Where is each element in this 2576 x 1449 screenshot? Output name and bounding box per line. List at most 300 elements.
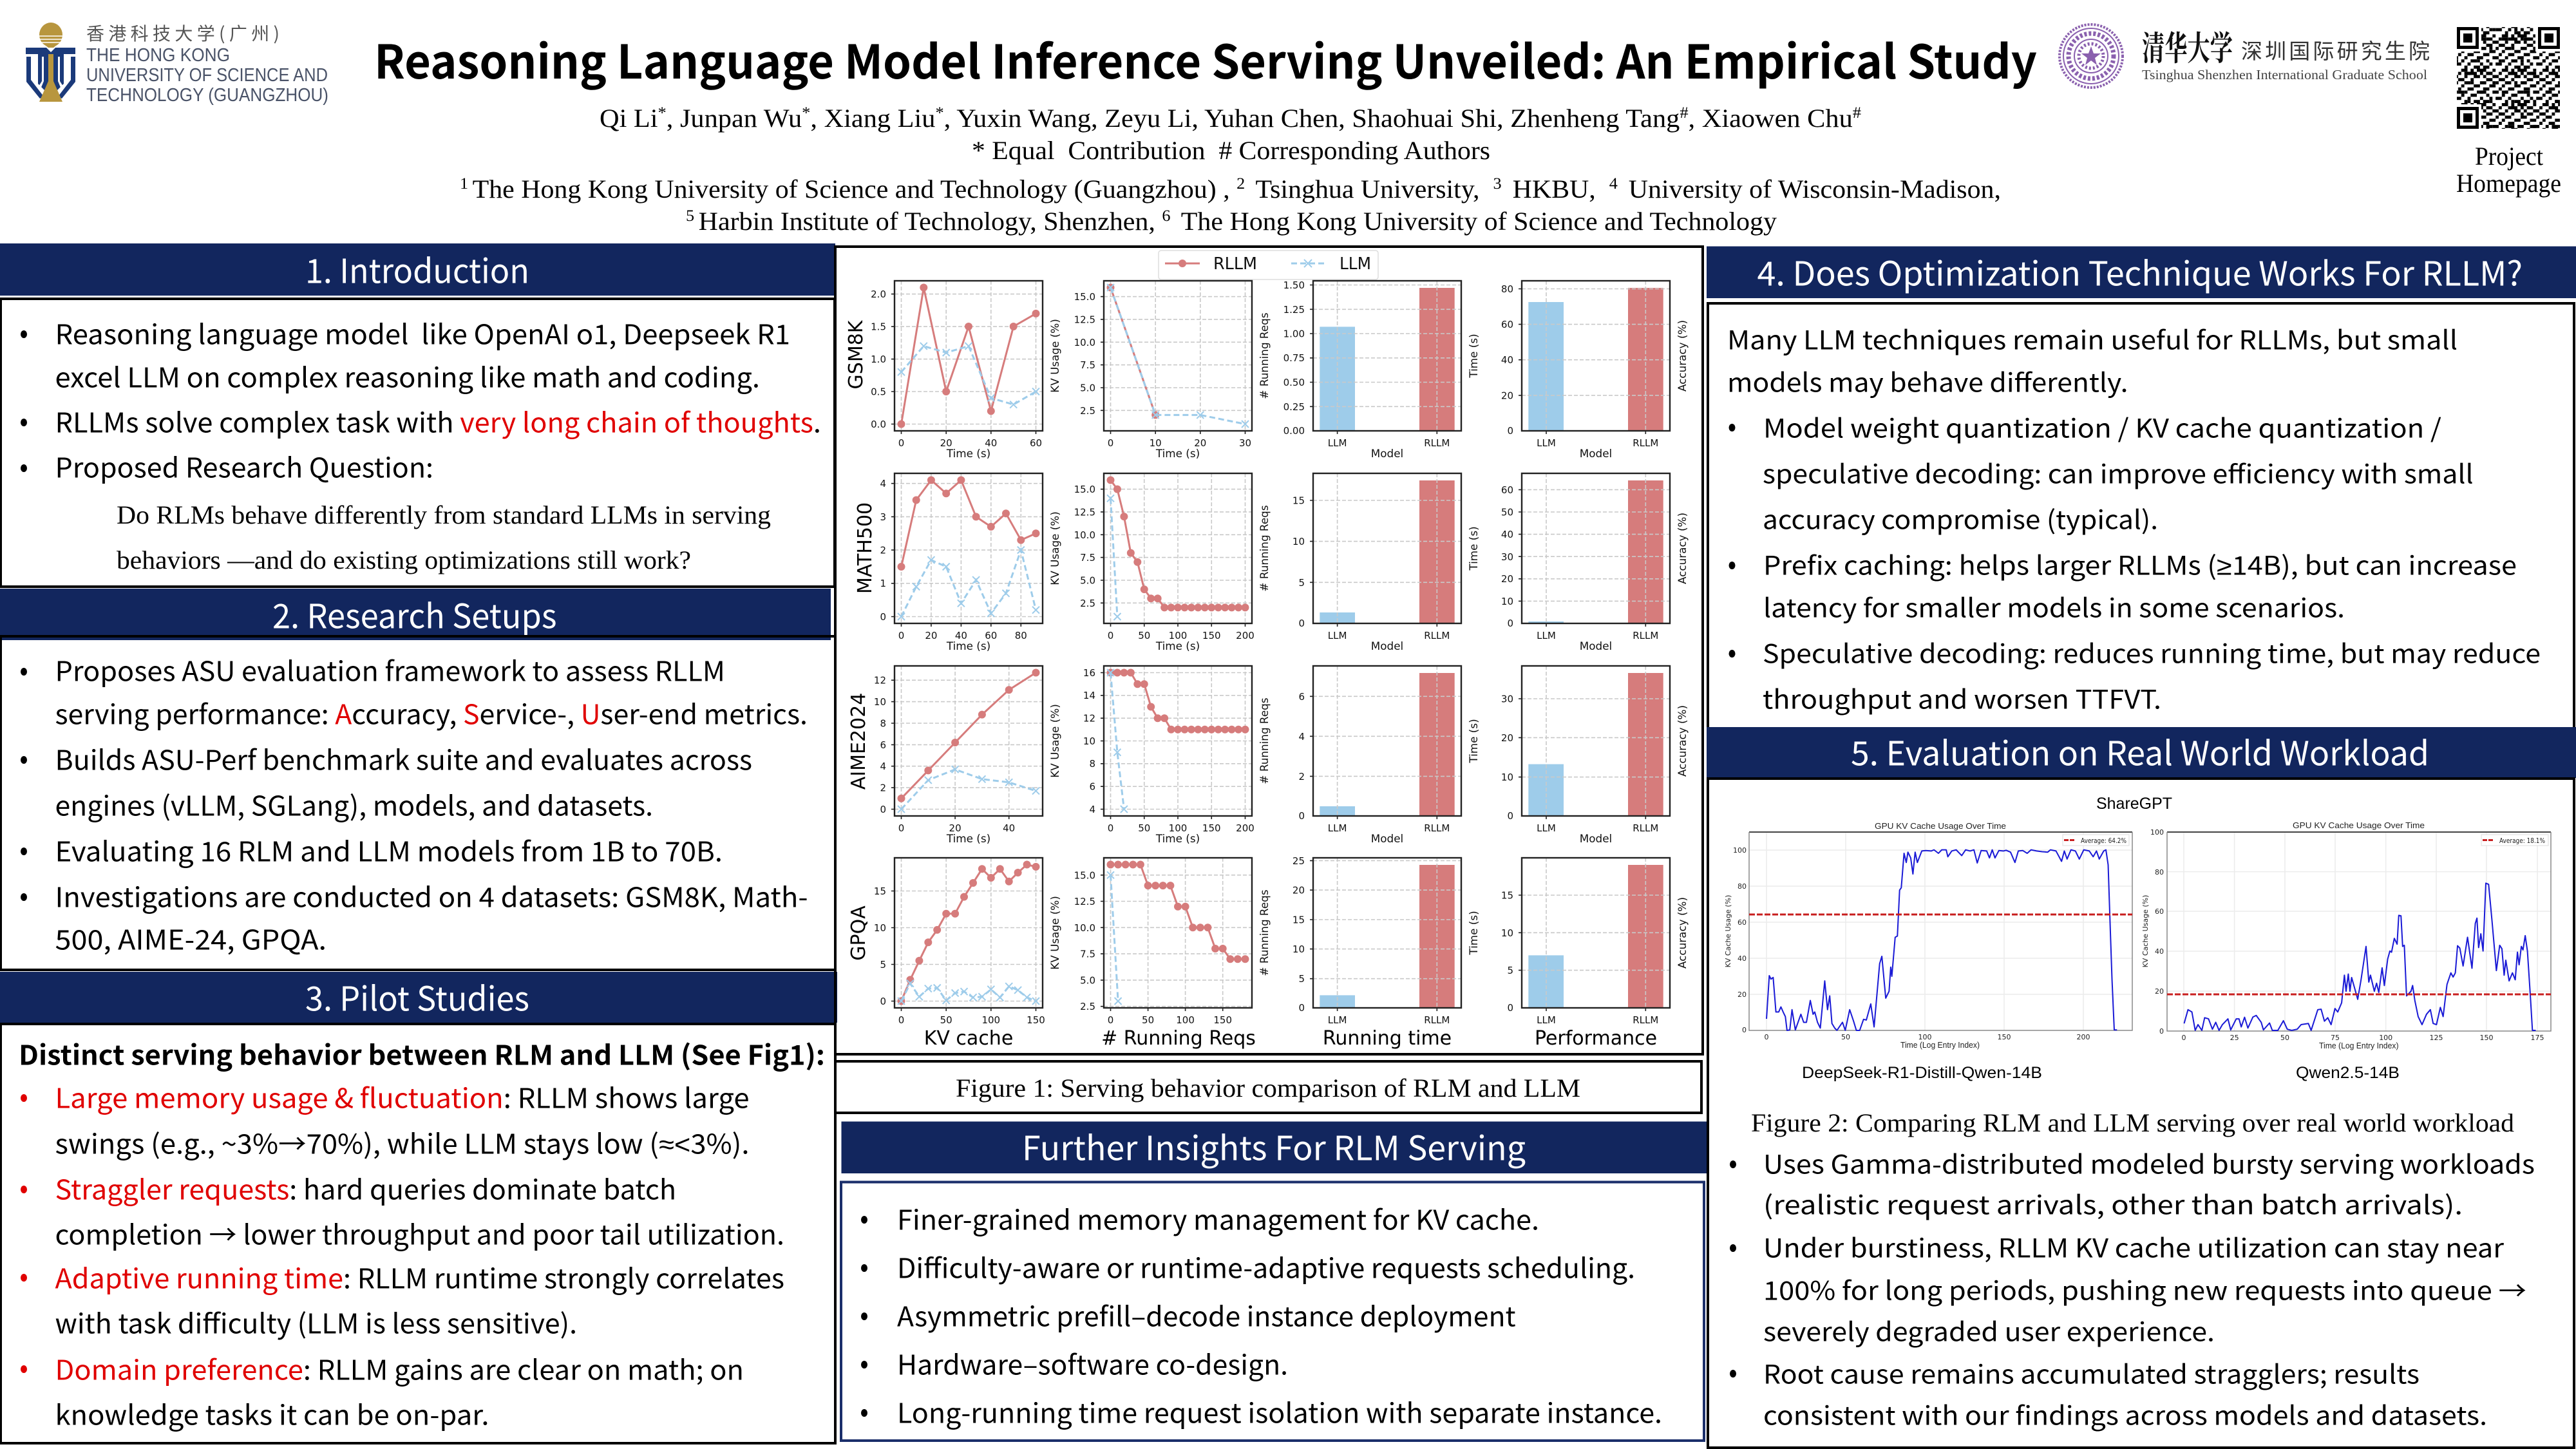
line chart: AIME2024 running requests: 200: [1236, 822, 1255, 834]
text block: introduction body: RLLMs solve complex task with very long chain of thoughts .: [55, 402, 821, 440]
text block: further insights list: Long-running time request isolation with separate instance.: [897, 1392, 1662, 1431]
line chart: MATH500 KV usage: 1: [880, 578, 886, 589]
panel: figure 1 charts: [835, 247, 1703, 1054]
bar chart: GPQA running time: 10: [1293, 943, 1305, 955]
line chart: DeepSeek-R1-Distill-Qwen-14B KV cache: 0: [1742, 1026, 1747, 1034]
text block: research setups body: [1, 636, 835, 970]
line chart: AIME2024 KV usage: 8: [880, 717, 886, 729]
heading: introduction: 1. Introduction: [305, 245, 529, 292]
bar chart: MATH500 accuracy: 0: [1507, 618, 1513, 629]
bar chart: AIME2024 accuracy: 30: [1501, 693, 1513, 705]
authors block: , Yuxin Wang, Zeyu Li, Yuhan Chen, Shaohuai Shi, Zhenheng Tang: [944, 104, 1680, 133]
line chart: MATH500 KV usage: 2: [880, 545, 886, 556]
line chart: DeepSeek-R1-Distill-Qwen-14B KV cache: 100: [1918, 1033, 1932, 1041]
line chart: GPQA running requests: 2.5: [1080, 1001, 1095, 1012]
line chart: DeepSeek-R1-Distill-Qwen-14B KV cache: 200: [2076, 1033, 2090, 1041]
bar chart: GSM8K running time: 1.25: [1283, 304, 1305, 316]
authors block: , Xiaowen Chu: [1689, 104, 1853, 133]
text block: research setups body: serving performance: Accuracy, Service-, User-end metrics.: [55, 693, 808, 733]
line chart: Qwen2.5-14B KV cache: [2141, 820, 2551, 1050]
bar chart: GPQA running time: [1293, 855, 1480, 1026]
line chart: GPQA running requests: 150: [1213, 1014, 1232, 1026]
bar chart: GSM8K running time: 1.00: [1283, 328, 1305, 340]
line chart: AIME2024 running requests: 12: [1083, 713, 1095, 724]
authors block: University of Wisconsin-Madison,: [1622, 175, 2001, 204]
line chart: DeepSeek-R1-Distill-Qwen-14B KV cache: 100: [1733, 846, 1747, 855]
line chart: AIME2024 running requests: [1083, 666, 1271, 845]
line chart: MATH500 KV usage: Time (s): [946, 639, 990, 652]
bar chart: AIME2024 running time: LLM: [1328, 822, 1347, 834]
bar chart: GSM8K running time: 0.25: [1283, 401, 1305, 413]
panel: pilot studies: [0, 972, 837, 1443]
line chart: GPQA KV usage: 15: [874, 886, 886, 897]
authors block: 1: [460, 175, 473, 193]
line chart: MATH500 KV usage: 0: [898, 630, 904, 641]
model names under charts: [1802, 1064, 2400, 1082]
text block: research setups body: Builds ASU-Perf benchmark suite and evaluates across: [55, 739, 752, 778]
line chart: GSM8K running requests: 10.0: [1074, 337, 1095, 348]
line chart: MATH500 KV usage: 60: [985, 630, 997, 641]
heading: research setups: [0, 589, 831, 640]
line chart: GSM8K KV usage: 0.5: [871, 386, 886, 398]
row label: GSM8K: GSM8K: [845, 319, 867, 389]
line chart: DeepSeek-R1-Distill-Qwen-14B KV cache: KV Cache Usage (%): [1724, 895, 1732, 967]
line chart: AIME2024 KV usage: 0: [880, 804, 886, 815]
line chart: GPQA running requests: 50: [1142, 1014, 1154, 1026]
line chart: MATH500 KV usage: KV Usage (%): [1048, 511, 1061, 585]
text block: pilot studies body: [1, 1024, 835, 1443]
bar chart: GSM8K running time: 1.50: [1283, 279, 1305, 291]
line chart: Qwen2.5-14B KV cache: 20: [2155, 987, 2164, 996]
bar chart: GPQA accuracy: 10: [1501, 927, 1513, 939]
line chart: GPQA KV usage: 5: [880, 959, 886, 971]
text block: pilot studies body: completion → lower throughput and poor tail utilization.: [55, 1213, 784, 1253]
line chart: Qwen2.5-14B KV cache: Average: 18.1%: [2499, 837, 2545, 845]
caption: figure 1: [835, 1061, 1701, 1113]
line chart: AIME2024 KV usage: 12: [874, 675, 886, 687]
bar chart: GSM8K running time: Model: [1371, 447, 1403, 460]
line chart: Qwen2.5-14B KV cache: 100: [2150, 828, 2164, 837]
line chart: GPQA KV usage: 150: [1027, 1014, 1045, 1026]
bar chart: MATH500 running time: Model: [1371, 639, 1403, 652]
line chart: AIME2024 KV usage: 4: [880, 761, 886, 772]
bar chart: GPQA accuracy: RLLM: [1633, 1014, 1658, 1026]
panel: real world workload: [1707, 726, 2576, 1448]
line chart: Qwen2.5-14B KV cache: KV Cache Usage (%): [2141, 895, 2150, 967]
bar chart: GPQA running time: Time (s): [1467, 911, 1480, 956]
line chart: AIME2024 running requests: 16: [1083, 667, 1095, 679]
line chart: Qwen2.5-14B KV cache: 25: [2230, 1034, 2239, 1042]
line chart: MATH500 running requests: 0: [1108, 630, 1113, 641]
line chart: AIME2024 KV usage: 10: [874, 696, 886, 708]
authors block: 2: [1236, 175, 1249, 193]
bar chart: AIME2024 running time: 2: [1298, 771, 1305, 782]
line chart: AIME2024 running requests: 150: [1202, 822, 1221, 834]
bar chart: MATH500 running time: 15: [1293, 495, 1305, 506]
line chart: GSM8K KV usage: 0.0: [871, 419, 886, 430]
bar chart: AIME2024 running time: 4: [1298, 731, 1305, 743]
line chart: AIME2024 running requests: # Running Reqs: [1258, 697, 1271, 784]
heading: introduction: [0, 243, 835, 296]
column label: Performance: Performance: [1535, 1027, 1657, 1050]
line chart: Qwen2.5-14B KV cache: 175: [2531, 1034, 2544, 1042]
text block: optimization techniques body: Many LLM techniques remain useful for RLLMs, but small: [1727, 319, 2458, 357]
heading: further insights: Further Insights For RLM Serving: [1022, 1122, 1526, 1170]
bar chart: GSM8K accuracy: RLLM: [1633, 437, 1658, 449]
bar chart: MATH500 accuracy: Model: [1580, 639, 1612, 652]
bar chart: AIME2024 accuracy: 0: [1507, 810, 1513, 822]
bar chart: GPQA running time: 20: [1293, 885, 1305, 896]
bar chart: AIME2024 accuracy: Model: [1580, 832, 1612, 845]
line chart: Qwen2.5-14B KV cache: GPU KV Cache Usage Over Time: [2293, 820, 2425, 830]
bar chart: MATH500 accuracy: 60: [1501, 484, 1513, 496]
line chart: GSM8K KV usage: Time (s): [946, 447, 990, 460]
heading: research setups: 2. Research Setups: [272, 590, 556, 638]
bar chart: GSM8K accuracy: Model: [1580, 447, 1612, 460]
logo text: school name: [2142, 21, 2430, 82]
text block: optimization techniques body: models may behave differently.: [1727, 362, 2128, 399]
authors block: 3: [1493, 175, 1506, 193]
text block: real world workload findings: severely degraded user experience.: [1763, 1311, 2215, 1349]
authors block: , Xiang Liu: [810, 104, 935, 133]
bar chart: GSM8K running time: 0.00: [1283, 425, 1305, 437]
text block: pilot studies body: swings (e.g., ~3%→70%), while LLM stays low ( ≈<3%).: [55, 1123, 750, 1162]
text block: optimization techniques body: accuracy compromise (typical).: [1763, 500, 2158, 537]
line chart: GSM8K running requests: 0: [1108, 437, 1113, 449]
line chart: MATH500 running requests: 200: [1236, 630, 1255, 641]
row label: MATH500: MATH500: [854, 502, 876, 594]
line chart: DeepSeek-R1-Distill-Qwen-14B KV cache: 40: [1738, 954, 1747, 963]
column label: Running Reqs: # Running Reqs: [1101, 1027, 1256, 1050]
line chart: MATH500 running requests: 5.0: [1080, 574, 1095, 586]
line chart: Qwen2.5-14B KV cache: 40: [2155, 947, 2164, 956]
caption: figure 1: Figure 1: Serving behavior comparison of RLM and LLM: [956, 1074, 1580, 1103]
authors block: 4: [1609, 175, 1622, 193]
bar chart: GSM8K accuracy: 80: [1501, 283, 1513, 295]
line chart: MATH500 running requests: [1074, 473, 1271, 652]
line chart: MATH500 running requests: 2.5: [1080, 598, 1095, 609]
text block: real world workload findings: Root cause remains accumulated stragglers; results: [1763, 1354, 2420, 1391]
text block: real world workload findings: (realistic request arrivals, other than batch arrivals).: [1763, 1185, 2463, 1222]
bar chart: GSM8K running time: Time (s): [1467, 334, 1480, 379]
line chart: MATH500 KV usage: 3: [880, 511, 886, 523]
text block: introduction body: Do RLMs behave differently from standard LLMs in serving: [117, 500, 771, 529]
bar chart: GSM8K running time: RLLM: [1424, 437, 1450, 449]
line chart: GSM8K KV usage: 1.5: [871, 321, 886, 333]
line chart: AIME2024 running requests: 6: [1089, 781, 1095, 793]
bar chart: MATH500 accuracy: RLLM: [1633, 630, 1658, 641]
line chart: GPQA KV usage: 10: [874, 922, 886, 934]
bar chart: GPQA accuracy: Accuracy (%): [1676, 897, 1689, 969]
authors block: * Equal Contribution # Corresponding Authors: [972, 136, 1490, 165]
line chart: MATH500 KV usage: 4: [880, 478, 886, 489]
QR caption: Homepage: [2456, 169, 2561, 198]
text block: introduction body: Proposed Research Question:: [55, 447, 433, 486]
line chart: GPQA running requests: 0: [1108, 1014, 1113, 1026]
authors block: Qi Li: [600, 104, 655, 133]
bar chart: GPQA running time: LLM: [1328, 1014, 1347, 1026]
authors block: The Hong Kong University of Science and Technology: [1175, 207, 1777, 236]
bar chart: MATH500 accuracy: 10: [1501, 596, 1513, 607]
legend: RLLM: [1213, 254, 1257, 273]
line chart: DeepSeek-R1-Distill-Qwen-14B KV cache: 60: [1738, 918, 1747, 927]
authors block: The Hong Kong University of Science and Technology (Guangzhou) ,: [473, 175, 1236, 204]
icon: QR code: [2457, 27, 2560, 129]
line chart: MATH500 running requests: 150: [1202, 630, 1221, 641]
line chart: DeepSeek-R1-Distill-Qwen-14B KV cache: 150: [1998, 1033, 2011, 1041]
line chart: GSM8K KV usage: 0: [898, 437, 904, 449]
bar chart: AIME2024 accuracy: 10: [1501, 772, 1513, 783]
bar chart: MATH500 running time: 5: [1298, 577, 1305, 589]
line chart: Qwen2.5-14B KV cache: 80: [2155, 868, 2164, 876]
line chart: GSM8K KV usage: 2.0: [871, 289, 886, 300]
bar chart: MATH500 accuracy: 50: [1501, 506, 1513, 518]
authors block: #: [1680, 104, 1689, 122]
icon: HKUST emblem: [26, 23, 75, 102]
line chart: AIME2024 running requests: 10: [1083, 735, 1095, 747]
bar chart: MATH500 accuracy: Accuracy (%): [1676, 513, 1689, 584]
bar chart: GSM8K accuracy: [1501, 281, 1689, 460]
authors block: 6: [1162, 207, 1175, 225]
text block: pilot studies body: Large memory usage & fluctuation : RLLM shows large: [55, 1077, 750, 1117]
line chart: GSM8K running requests: 7.5: [1080, 359, 1095, 371]
bar chart: AIME2024 accuracy: LLM: [1537, 822, 1556, 834]
line chart: DeepSeek-R1-Distill-Qwen-14B KV cache: 20: [1738, 990, 1747, 999]
line chart: GSM8K running requests: 30: [1239, 437, 1251, 449]
text block: optimization techniques body: speculative decoding: can improve efficiency with small: [1763, 453, 2474, 491]
line chart: GPQA KV usage: KV Usage (%): [1048, 896, 1061, 970]
line chart: GSM8K KV usage: 60: [1030, 437, 1042, 449]
panel: introduction: [0, 243, 835, 587]
text block: introduction body: [1, 299, 835, 587]
bar chart: GSM8K running time: LLM: [1328, 437, 1347, 449]
line chart: MATH500 running requests: 7.5: [1080, 552, 1095, 564]
bar chart: GPQA accuracy: 0: [1507, 1002, 1513, 1014]
text block: introduction body: excel LLM on complex reasoning like math and coding.: [55, 357, 760, 395]
heading: further insights: [841, 1122, 1707, 1173]
line chart: GPQA running requests: # Running Reqs: [1258, 889, 1271, 976]
legend: [1159, 251, 1378, 279]
bar chart: MATH500 accuracy: [1501, 473, 1689, 652]
panel: optimization techniques: [1707, 246, 2576, 728]
authors block: [460, 104, 2001, 236]
line chart: GSM8K running requests: 5.0: [1080, 383, 1095, 394]
line chart: GSM8K running requests: 2.5: [1080, 405, 1095, 417]
line chart: AIME2024 KV usage: KV Usage (%): [1048, 704, 1061, 778]
logo text: university name: [86, 20, 328, 106]
line chart: GSM8K running requests: Time (s): [1155, 447, 1200, 460]
bar chart: GSM8K accuracy: 40: [1501, 354, 1513, 366]
line chart: AIME2024 KV usage: 6: [880, 739, 886, 751]
title: Reasoning Language Model Inference Serving Unveiled: An Empirical Study: [374, 24, 2037, 92]
bar chart: MATH500 running time: RLLM: [1424, 630, 1450, 641]
line chart: Qwen2.5-14B KV cache: 75: [2331, 1034, 2340, 1042]
model names under charts: Qwen2.5-14B: [2296, 1064, 2400, 1082]
line chart: AIME2024 running requests: 0: [1108, 822, 1113, 834]
line chart: MATH500 KV usage: [880, 473, 1061, 652]
line chart: AIME2024 running requests: 50: [1138, 822, 1150, 834]
text block: introduction body: Reasoning language model like OpenAI o1, Deepseek R1: [55, 313, 790, 353]
bar chart: MATH500 accuracy: LLM: [1537, 630, 1556, 641]
line chart: DeepSeek-R1-Distill-Qwen-14B KV cache: GPU KV Cache Usage Over Time: [1875, 821, 2006, 831]
text block: optimization techniques body: [1708, 303, 2574, 728]
line chart: GPQA running requests: 12.5: [1074, 896, 1095, 907]
line chart: GPQA KV usage: 50: [940, 1014, 952, 1026]
text block: pilot studies body: Distinct serving behavior between RLM and LLM (See Fig1):: [19, 1034, 825, 1073]
bar chart: GPQA running time: RLLM: [1424, 1014, 1450, 1026]
line chart: GPQA KV usage: [874, 858, 1061, 1026]
row label: AIME2024: AIME2024: [848, 693, 870, 790]
bar chart: GSM8K accuracy: 60: [1501, 319, 1513, 330]
text block: pilot studies body: Straggler requests: hard queries dominate batch: [55, 1168, 676, 1208]
line chart: GSM8K KV usage: 1.0: [871, 354, 886, 365]
text block: optimization techniques body: Prefix caching: helps larger RLLMs ( ≥14B), but can increase: [1763, 545, 2517, 582]
text block: pilot studies body: knowledge tasks it can be on-par.: [55, 1394, 489, 1434]
line chart: GSM8K KV usage: KV Usage (%): [1048, 319, 1061, 393]
authors block: *: [658, 104, 667, 122]
authors block: HKBU,: [1506, 175, 1609, 204]
bar chart: MATH500 running time: 10: [1293, 536, 1305, 547]
line chart: GPQA running requests: 15.0: [1074, 869, 1095, 881]
line chart: GPQA running requests: 10.0: [1074, 922, 1095, 934]
line chart: Qwen2.5-14B KV cache: Time (Log Entry Index): [2319, 1041, 2398, 1050]
text block: further insights list: Finer-grained memory management for KV cache.: [897, 1199, 1539, 1238]
line chart: GSM8K running requests: 12.5: [1074, 314, 1095, 325]
QR caption: [2456, 142, 2561, 198]
line chart: MATH500 KV usage: 40: [955, 630, 967, 641]
line chart: GPQA running requests: 100: [1176, 1014, 1195, 1026]
heading: pilot studies: 3. Pilot Studies: [305, 972, 529, 1020]
bar chart: GPQA accuracy: [1501, 858, 1689, 1026]
bar chart: AIME2024 accuracy: [1501, 666, 1689, 845]
bar chart: GPQA running time: 25: [1293, 855, 1305, 867]
authors block: Tsinghua University,: [1249, 175, 1493, 204]
line chart: AIME2024 KV usage: 2: [880, 782, 886, 794]
heading: real world workload: [1707, 726, 2576, 778]
line chart: DeepSeek-R1-Distill-Qwen-14B KV cache: Time (Log Entry Index): [1900, 1040, 1980, 1050]
text block: real world workload findings: Uses Gamma-distributed modeled bursty serving workloads: [1763, 1144, 2535, 1181]
text block: real world workload findings: 100% for long periods, pushing new requests into queue →: [1763, 1270, 2526, 1307]
line chart: Qwen2.5-14B KV cache: 125: [2429, 1034, 2443, 1042]
text block: optimization techniques body: Speculative decoding: reduces running time, but may reduce: [1763, 634, 2541, 671]
text block: introduction body: behaviors —and do existing optimizations still work?: [117, 545, 691, 574]
line chart: DeepSeek-R1-Distill-Qwen-14B KV cache: Average: 64.2%: [2081, 837, 2126, 845]
text block: real world workload findings: Under burstiness, RLLM KV cache utilization can stay near: [1763, 1227, 2505, 1265]
logo text: school name: Tsinghua Shenzhen International Graduate School: [2142, 67, 2427, 82]
text block: further insights list: Asymmetric prefill–decode instance deployment: [897, 1296, 1516, 1334]
line chart: DeepSeek-R1-Distill-Qwen-14B KV cache: 0: [1765, 1033, 1768, 1041]
line chart: GPQA KV usage: 100: [981, 1014, 1000, 1026]
authors block: *: [935, 104, 944, 122]
bar chart: GSM8K accuracy: 20: [1501, 390, 1513, 402]
heading: real world workload: 5. Evaluation on Real World Workload: [1851, 726, 2429, 775]
caption: figure 2: Figure 2: Comparing RLM and LLM serving over real world workload: [1751, 1108, 2514, 1137]
authors block: #: [1853, 104, 1862, 122]
logo text: school name: 深圳国际研究生院: [2241, 34, 2430, 65]
line chart: Qwen2.5-14B KV cache: 50: [2280, 1034, 2289, 1042]
bar chart: GPQA running time: 15: [1293, 914, 1305, 926]
line chart: GPQA KV usage: 0: [880, 996, 886, 1007]
line chart: MATH500 running requests: Time (s): [1155, 639, 1200, 652]
logo text: university name: 香港科技大学(广州): [86, 20, 279, 46]
bar chart: AIME2024 accuracy: RLLM: [1633, 822, 1658, 834]
line chart: GSM8K KV usage: [871, 281, 1061, 460]
bar chart: GPQA accuracy: 5: [1507, 965, 1513, 976]
text block: research setups body: Investigations are conducted on 4 datasets: GSM8K, Math-: [55, 876, 808, 916]
heading: pilot studies: [0, 972, 837, 1023]
logo: HKUST Guangzhou: [26, 20, 328, 106]
bar chart: GSM8K running time: [1283, 279, 1480, 460]
line chart: AIME2024 running requests: Time (s): [1155, 832, 1200, 845]
text block: further insights list: [841, 1182, 1704, 1441]
line chart: MATH500 KV usage: 0: [880, 611, 886, 623]
text block: research setups body: 500, AIME-24, GPQA.: [55, 918, 327, 958]
line chart: AIME2024 running requests: 8: [1089, 758, 1095, 770]
bar chart: AIME2024 running time: 0: [1298, 810, 1305, 822]
bar chart: GSM8K accuracy: Accuracy (%): [1676, 320, 1689, 392]
bar chart: MATH500 accuracy: 20: [1501, 573, 1513, 585]
bar chart: MATH500 running time: [1293, 473, 1480, 652]
line chart: AIME2024 KV usage: 0: [898, 822, 904, 834]
logo text: school name: 清华大学: [2142, 21, 2233, 70]
bar chart: GSM8K accuracy: LLM: [1537, 437, 1556, 449]
text block: optimization techniques body: latency for smaller models in some scenarios.: [1763, 587, 2345, 625]
panel: research setups: [0, 589, 835, 970]
line chart: MATH500 KV usage: 20: [925, 630, 937, 641]
line chart: DeepSeek-R1-Distill-Qwen-14B KV cache: 50: [1841, 1033, 1850, 1041]
text block: pilot studies body: with task difficulty (LLM is less sensitive).: [55, 1302, 577, 1342]
logo text: university name: THE HONG KONG: [86, 45, 230, 66]
line chart: MATH500 running requests: 15.0: [1074, 484, 1095, 495]
bar chart: MATH500 accuracy: 40: [1501, 529, 1513, 540]
logo: Tsinghua Shenzhen: [2060, 21, 2430, 88]
line chart: Qwen2.5-14B KV cache: 150: [2479, 1034, 2494, 1042]
bar chart: AIME2024 running time: 6: [1298, 691, 1305, 703]
text block: research setups body: Evaluating 16 RLM and LLM models from 1B to 70B.: [55, 831, 723, 869]
line chart: GPQA KV usage: 0: [898, 1014, 904, 1026]
line chart: GPQA running requests: 5.0: [1080, 974, 1095, 986]
line chart: DeepSeek-R1-Distill-Qwen-14B KV cache: [1724, 821, 2132, 1050]
text block: further insights list: Difficulty-aware or runtime-adaptive requests scheduling.: [897, 1247, 1635, 1287]
line chart: MATH500 running requests: 12.5: [1074, 506, 1095, 518]
line chart: GSM8K running requests: 15.0: [1074, 291, 1095, 303]
authors block: Harbin Institute of Technology, Shenzhen,: [699, 207, 1162, 236]
bar chart: MATH500 running time: LLM: [1328, 630, 1347, 641]
heading: optimization techniques: 4. Does Optimization Technique Works For RLLM?: [1757, 247, 2523, 295]
line chart: AIME2024 running requests: 14: [1083, 690, 1095, 701]
line chart: GPQA running requests: 7.5: [1080, 949, 1095, 960]
line chart: GSM8K KV usage: 40: [985, 437, 997, 449]
line chart: MATH500 KV usage: 80: [1015, 630, 1027, 641]
authors block: 5: [686, 207, 699, 225]
line chart: AIME2024 KV usage: Time (s): [946, 832, 990, 845]
line chart: AIME2024 running requests: 100: [1169, 822, 1187, 834]
text block: research setups body: Proposes ASU evaluation framework to assess RLLM: [55, 650, 725, 689]
QR caption: Project: [2475, 142, 2543, 171]
model names under charts: DeepSeek-R1-Distill-Qwen-14B: [1802, 1064, 2042, 1082]
line chart: Qwen2.5-14B KV cache: 100: [2379, 1034, 2392, 1042]
line chart: GSM8K running requests: 10: [1150, 437, 1162, 449]
bar chart: GSM8K running time: 0.75: [1283, 352, 1305, 364]
line chart: AIME2024 KV usage: [874, 666, 1061, 845]
bar chart: MATH500 accuracy: 30: [1501, 551, 1513, 563]
bar chart: MATH500 running time: Time (s): [1467, 526, 1480, 571]
line chart: GSM8K running requests: 20: [1194, 437, 1206, 449]
bar chart: AIME2024 running time: RLLM: [1424, 822, 1450, 834]
authors block: *: [802, 104, 810, 122]
bar chart: AIME2024 running time: Time (s): [1467, 719, 1480, 764]
line chart: Qwen2.5-14B KV cache: 0: [2159, 1027, 2164, 1036]
